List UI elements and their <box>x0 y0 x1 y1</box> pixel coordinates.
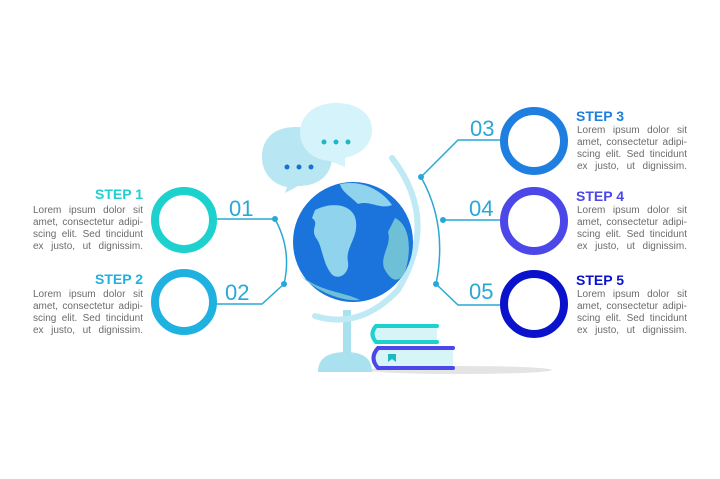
text: Lorem ipsum dolor sit amet, consectetur adipi- scing elit. Sed tincidunt ex justo, ut dignissim. <box>33 289 143 336</box>
connectors left <box>216 140 500 305</box>
step 5 text <box>576 272 687 336</box>
numbers <box>225 116 494 305</box>
numbers: 02 <box>225 280 249 305</box>
text: STEP 2 <box>95 271 143 287</box>
numbers: 01 <box>229 196 253 221</box>
numbers: 04 <box>469 196 493 221</box>
step 1 text <box>33 186 143 252</box>
step 3 text <box>576 108 687 172</box>
text: Lorem ipsum dolor sit amet, consectetur adipi- scing elit. Sed tincidunt ex justo, ut dignissim. <box>577 205 687 252</box>
step 2 text <box>33 271 143 336</box>
globe with stand <box>293 158 418 372</box>
step circles <box>155 111 564 334</box>
text: STEP 1 <box>95 186 143 202</box>
text: STEP 5 <box>576 272 624 288</box>
numbers: 05 <box>469 279 493 304</box>
books <box>372 326 453 368</box>
numbers: 03 <box>470 116 494 141</box>
text: STEP 3 <box>576 108 624 124</box>
text: Lorem ipsum dolor sit amet, consectetur adipi- scing elit. Sed tincidunt ex justo, ut dignissim. <box>577 125 687 172</box>
text: STEP 4 <box>576 188 624 204</box>
step 4 text <box>576 188 687 252</box>
speech bubbles <box>262 103 372 193</box>
text: Lorem ipsum dolor sit amet, consectetur adipi- scing elit. Sed tincidunt ex justo, ut dignissim. <box>577 289 687 336</box>
text: Lorem ipsum dolor sit amet, consectetur adipi- scing elit. Sed tincidunt ex justo, ut dignissim. <box>33 205 143 252</box>
shadow <box>368 366 552 374</box>
